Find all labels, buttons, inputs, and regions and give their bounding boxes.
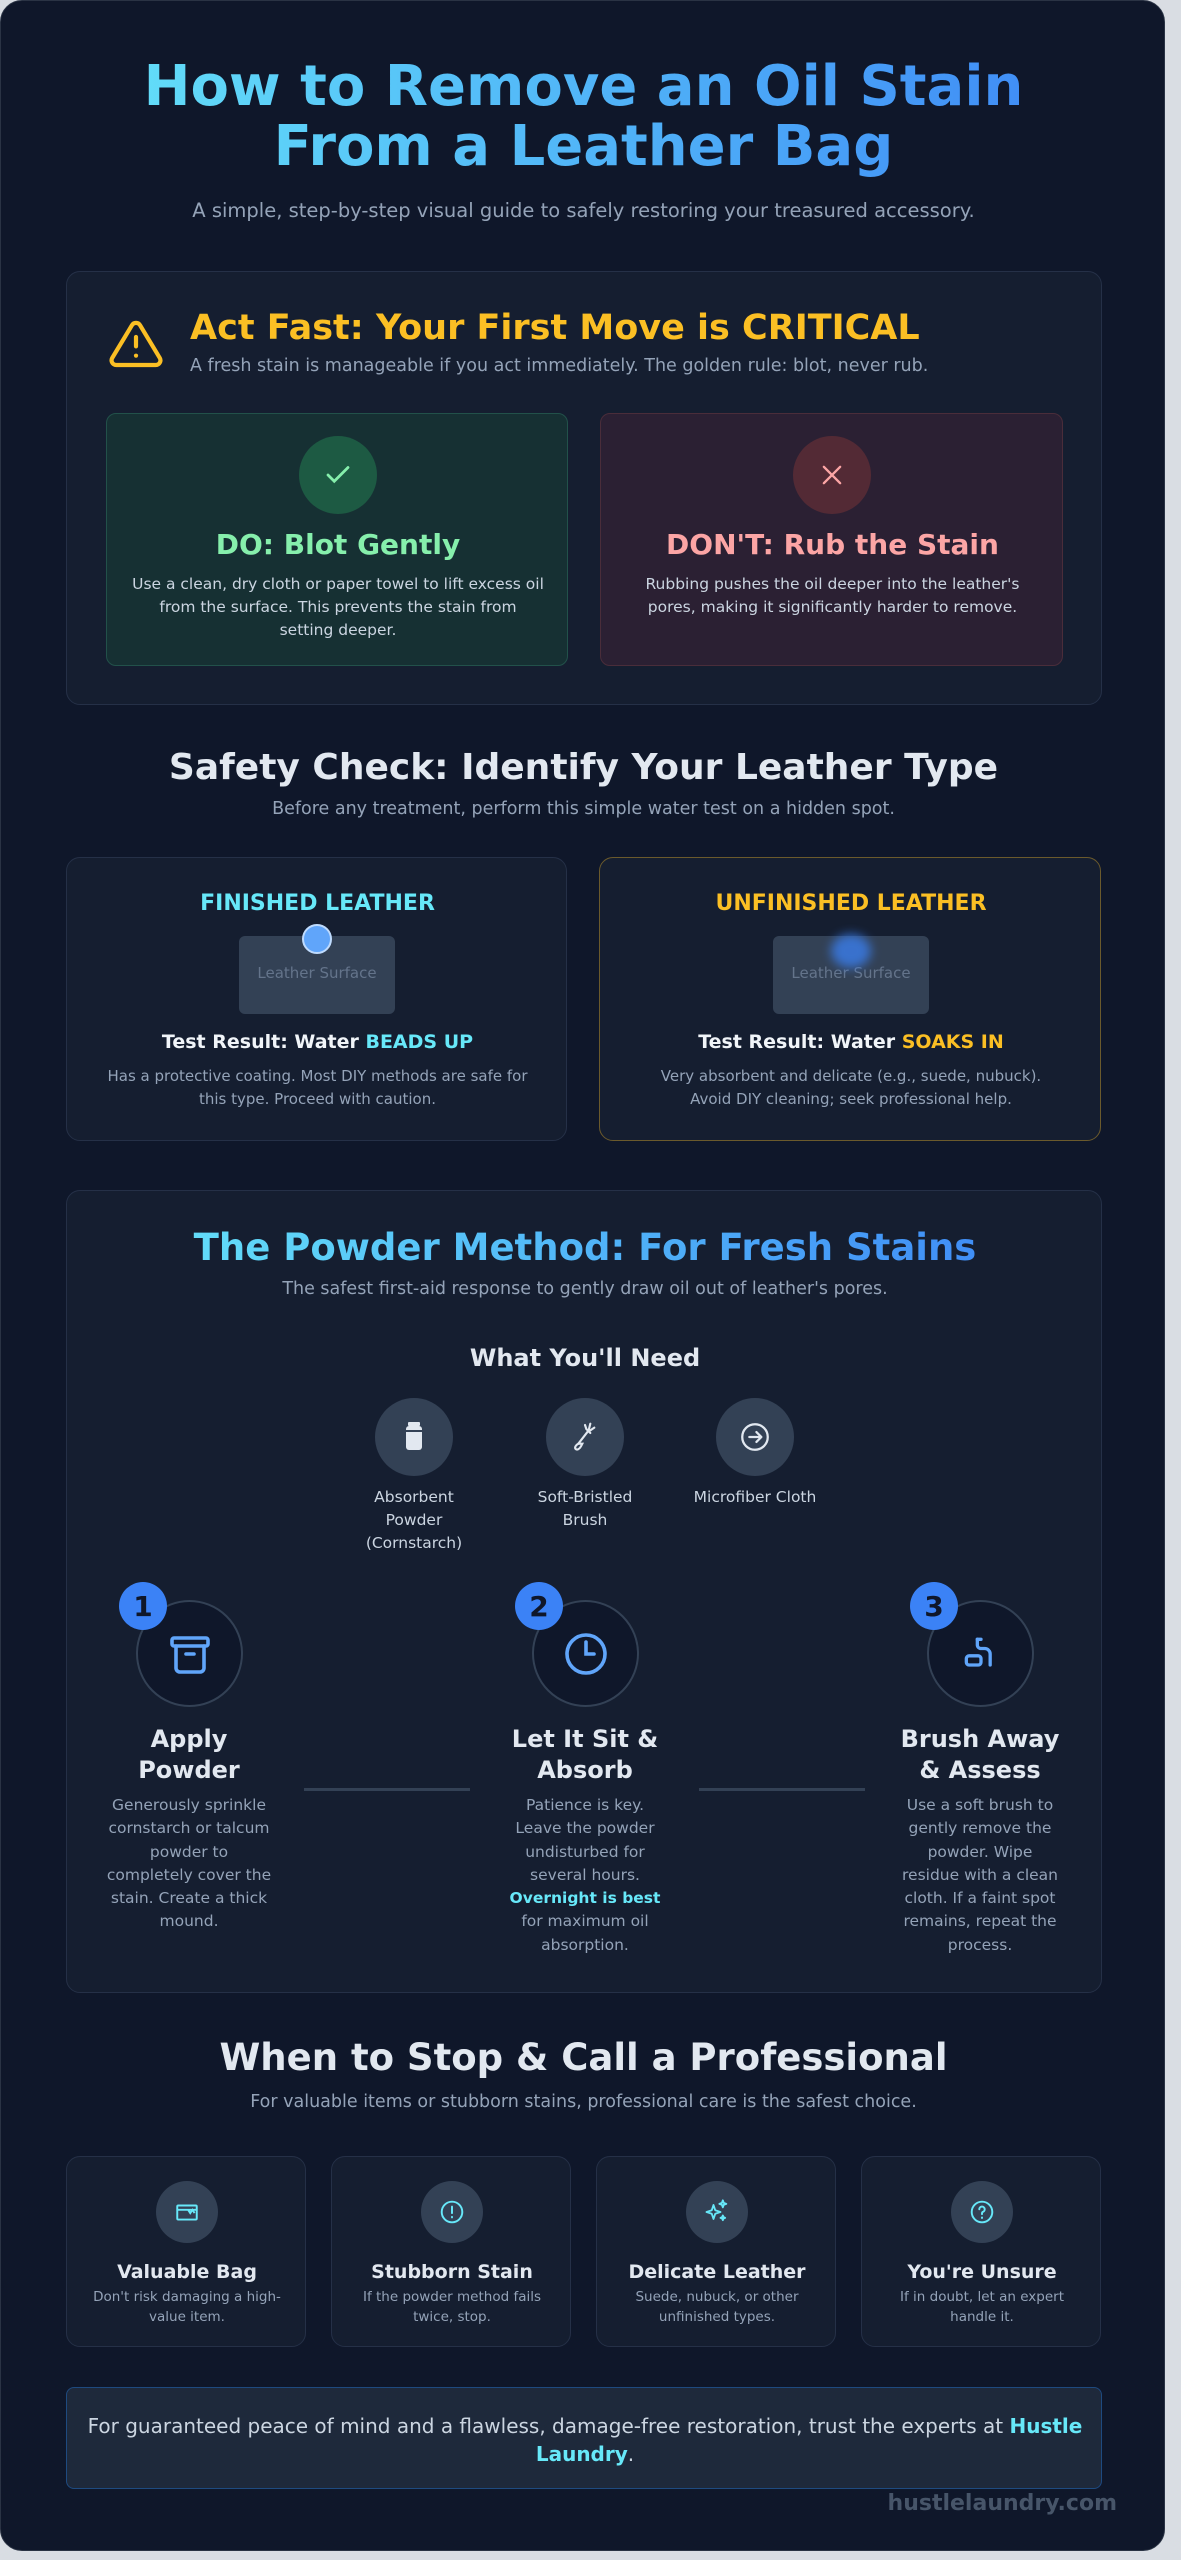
item: powder: Absorbent Powder (Cornstarch) bbox=[366, 1488, 462, 1552]
icon: x bbox=[793, 436, 871, 514]
heading: safety check: Safety Check: Identify Your Leather Type bbox=[169, 747, 998, 788]
leather surface with bead bbox=[239, 936, 395, 1014]
step 1: Apply Powder bbox=[138, 1725, 240, 1784]
card: stubborn stain: Stubborn Stain bbox=[371, 2261, 533, 2283]
card: do bbox=[106, 413, 568, 666]
text: unfinished desc: Very absorbent and delicate (e.g., suede, nubuck). Avoid DIY cleaning; seek professional help. bbox=[661, 1067, 1041, 1108]
badge 2 bbox=[515, 1582, 563, 1630]
badge 3: 3 bbox=[924, 1590, 944, 1622]
card: stubborn stain: If the powder method fails twice, stop. bbox=[363, 2289, 541, 2325]
panel: finished leather bbox=[66, 857, 567, 1141]
panel: act fast bbox=[66, 271, 1102, 705]
step 3: Use a soft brush to gently remove the powder. Wipe residue with a clean cloth. If a faint spot remains, repeat the process. bbox=[902, 1796, 1058, 1954]
heading: unfinished: UNFINISHED LEATHER bbox=[715, 891, 987, 916]
item: cloth bbox=[694, 1398, 816, 1506]
text: act fast sub: A fresh stain is manageable if you act immediately. The golden rule: blot, never rub. bbox=[190, 356, 928, 376]
heading: do: DO: Blot Gently bbox=[216, 528, 460, 561]
title bbox=[1, 57, 1166, 177]
badge 2: 2 bbox=[529, 1590, 549, 1622]
text: do bbox=[132, 575, 544, 639]
step 1: Generously sprinkle cornstarch or talcum powder to completely cover the stain. Create a thick mound. bbox=[107, 1796, 271, 1930]
step 2: Let It Sit & Absorb bbox=[512, 1725, 658, 1784]
leather surface with bead: Leather Surface bbox=[257, 964, 377, 982]
icon: check bbox=[299, 436, 377, 514]
item: brush bbox=[538, 1398, 632, 1529]
heading: finished: FINISHED LEATHER bbox=[200, 891, 435, 916]
card: delicate leather: Suede, nubuck, or other unfinished types. bbox=[635, 2289, 798, 2325]
card: you're unsure: You're Unsure bbox=[907, 2261, 1057, 2283]
text: safety sub: Before any treatment, perform this simple water test on a hidden spot. bbox=[272, 799, 895, 819]
card: delicate leather: Delicate Leather bbox=[628, 2261, 806, 2283]
card: valuable bag: Don't risk damaging a high-value item. bbox=[93, 2289, 281, 2325]
text: professional sub: For valuable items or stubborn stains, professional care is the safest choice. bbox=[250, 2092, 917, 2112]
text: do: setting deeper. bbox=[280, 621, 396, 639]
step 2: Patience is key. Leave the powder undisturbed for several hours. Overnight is best for maximum oil absorption. bbox=[510, 1796, 660, 1954]
leather surface with soak bbox=[773, 936, 929, 1014]
connector line 1 bbox=[304, 1788, 470, 1791]
card: don't bbox=[600, 413, 1063, 666]
step 2 bbox=[510, 1582, 660, 1954]
title: How to Remove an Oil Stain bbox=[144, 54, 1023, 119]
heading: don't: DON'T: Rub the Stain bbox=[666, 528, 999, 561]
card: delicate leather bbox=[596, 2156, 836, 2347]
icon: warning bbox=[109, 320, 163, 368]
heading: call a professional: When to Stop & Call a Professional bbox=[219, 2036, 948, 2079]
heading: what you'll need: What You'll Need bbox=[470, 1344, 700, 1372]
result: soaks in: Test Result: Water SOAKS IN bbox=[698, 1031, 1004, 1053]
text: finished desc: Has a protective coating. Most DIY methods are safe for this type. Proceed with caution. bbox=[108, 1067, 528, 1108]
footer: website: hustlelaundry.com bbox=[888, 2491, 1117, 2516]
subtitle: A simple, step-by-step visual guide to safely restoring your treasured accessory. bbox=[192, 199, 975, 222]
heading: act fast: Act Fast: Your First Move is CRITICAL bbox=[190, 308, 920, 348]
leather surface with soak: Leather Surface bbox=[791, 964, 911, 982]
panel: powder method bbox=[66, 1190, 1102, 1993]
card: stubborn stain bbox=[331, 2156, 571, 2347]
card: valuable bag: Valuable Bag bbox=[117, 2261, 257, 2283]
item: cloth: Microfiber Cloth bbox=[694, 1488, 816, 1506]
step 3 bbox=[901, 1582, 1059, 1954]
card: valuable bag bbox=[66, 2156, 306, 2347]
step 1 bbox=[107, 1582, 271, 1930]
callout: cta: For guaranteed peace of mind and a flawless, damage-free restoration, trust the experts at Hustle Laundry. bbox=[88, 2414, 1082, 2466]
icon: brush bbox=[927, 1600, 1034, 1707]
connector line 2 bbox=[699, 1788, 865, 1791]
text: powder sub: The safest first-aid response to gently draw oil out of leather's pores. bbox=[282, 1279, 888, 1299]
icon: clock bbox=[532, 1600, 639, 1707]
card: you're unsure: If in doubt, let an expert handle it. bbox=[900, 2289, 1064, 2325]
panel: unfinished leather bbox=[599, 857, 1101, 1141]
item: brush: Soft-Bristled Brush bbox=[538, 1488, 632, 1529]
text: do: Use a clean, dry cloth or paper towel to lift excess oil from the surface. This prevents the stain from bbox=[132, 575, 544, 616]
badge 1: 1 bbox=[133, 1590, 153, 1622]
callout: cta bbox=[66, 2387, 1102, 2489]
badge 1 bbox=[119, 1582, 167, 1630]
step 3: Brush Away & Assess bbox=[901, 1725, 1059, 1784]
item: powder bbox=[366, 1398, 462, 1552]
text: don't: Rubbing pushes the oil deeper into the leather's pores, making it significantly harder to remove. bbox=[645, 575, 1020, 616]
result: beads up: Test Result: Water BEADS UP bbox=[162, 1031, 473, 1053]
icon: box bbox=[136, 1600, 243, 1707]
badge 3 bbox=[910, 1582, 958, 1630]
card: you're unsure bbox=[861, 2156, 1101, 2347]
title: From a Leather Bag bbox=[274, 114, 893, 179]
